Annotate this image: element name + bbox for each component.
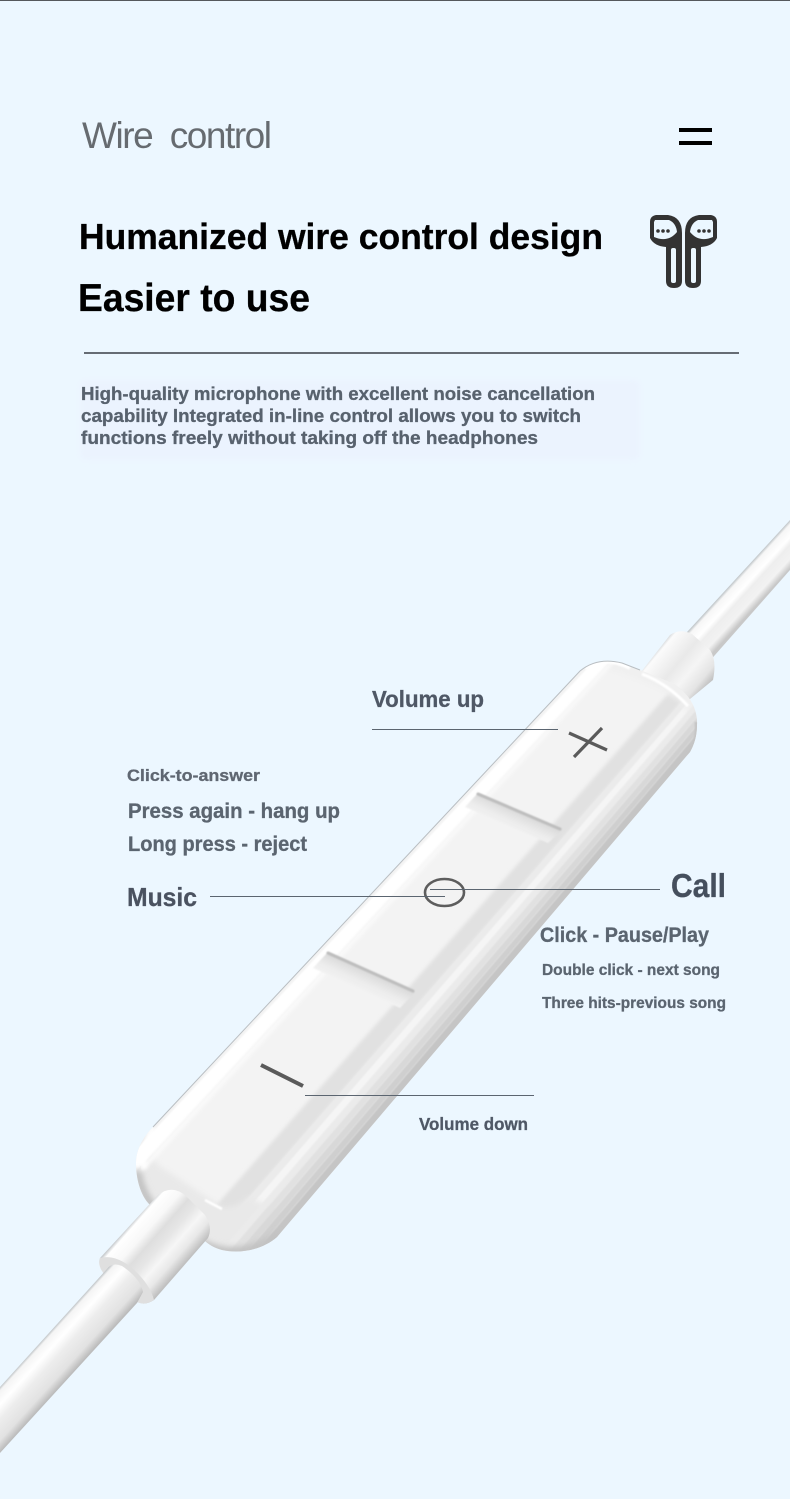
text: call controls list: Press again - hang up — [128, 799, 340, 823]
label: Volume down: Volume down — [419, 1114, 528, 1134]
lower slot — [313, 952, 415, 1008]
label: Call: Call — [671, 867, 726, 904]
text: music controls list: Three hits-previous song — [542, 995, 726, 1012]
upper cable — [676, 520, 790, 672]
text: call controls list: Click-to-answer — [127, 766, 260, 785]
intro paragraph — [80, 380, 640, 460]
icon: minus — [261, 1065, 303, 1086]
icon: plus — [569, 728, 607, 757]
heading: Humanized wire control design: Humanized wire control design — [79, 216, 603, 257]
intro paragraph: High-quality microphone with excellent noise cancellation — [81, 383, 595, 404]
remote body edge — [153, 661, 640, 1127]
text: music controls list: Double click - next song — [542, 962, 720, 979]
top end cap shading — [670, 686, 686, 698]
lower cable — [0, 1265, 143, 1453]
text: call controls list: Long press - reject — [128, 832, 307, 856]
remote body — [136, 662, 698, 1252]
icon: menu bars — [679, 128, 712, 145]
upper collar — [641, 631, 714, 699]
end highlights — [137, 1170, 280, 1252]
text: call controls list — [127, 766, 340, 856]
lower collar end ring — [99, 1257, 154, 1304]
section title: Wire control: Wire control — [82, 115, 272, 156]
heading: Easier to use: Easier to use — [78, 277, 310, 320]
intro paragraph: functions freely without taking off the headphones — [81, 427, 538, 448]
upper slot — [465, 793, 562, 843]
text: music controls list — [540, 923, 726, 1012]
icon: circle button — [425, 879, 464, 906]
label: Volume up: Volume up — [372, 686, 484, 712]
lower collar — [99, 1190, 210, 1304]
bottom end cap shading — [145, 1164, 260, 1245]
icon: earbuds — [650, 215, 717, 288]
in-line remote control product illustration — [0, 520, 790, 1453]
intro paragraph: capability Integrated in-line control allows you to switch — [81, 405, 581, 426]
text: music controls list: Click - Pause/Play — [540, 923, 709, 947]
label: Music: Music — [127, 882, 197, 912]
divider line — [84, 352, 739, 354]
